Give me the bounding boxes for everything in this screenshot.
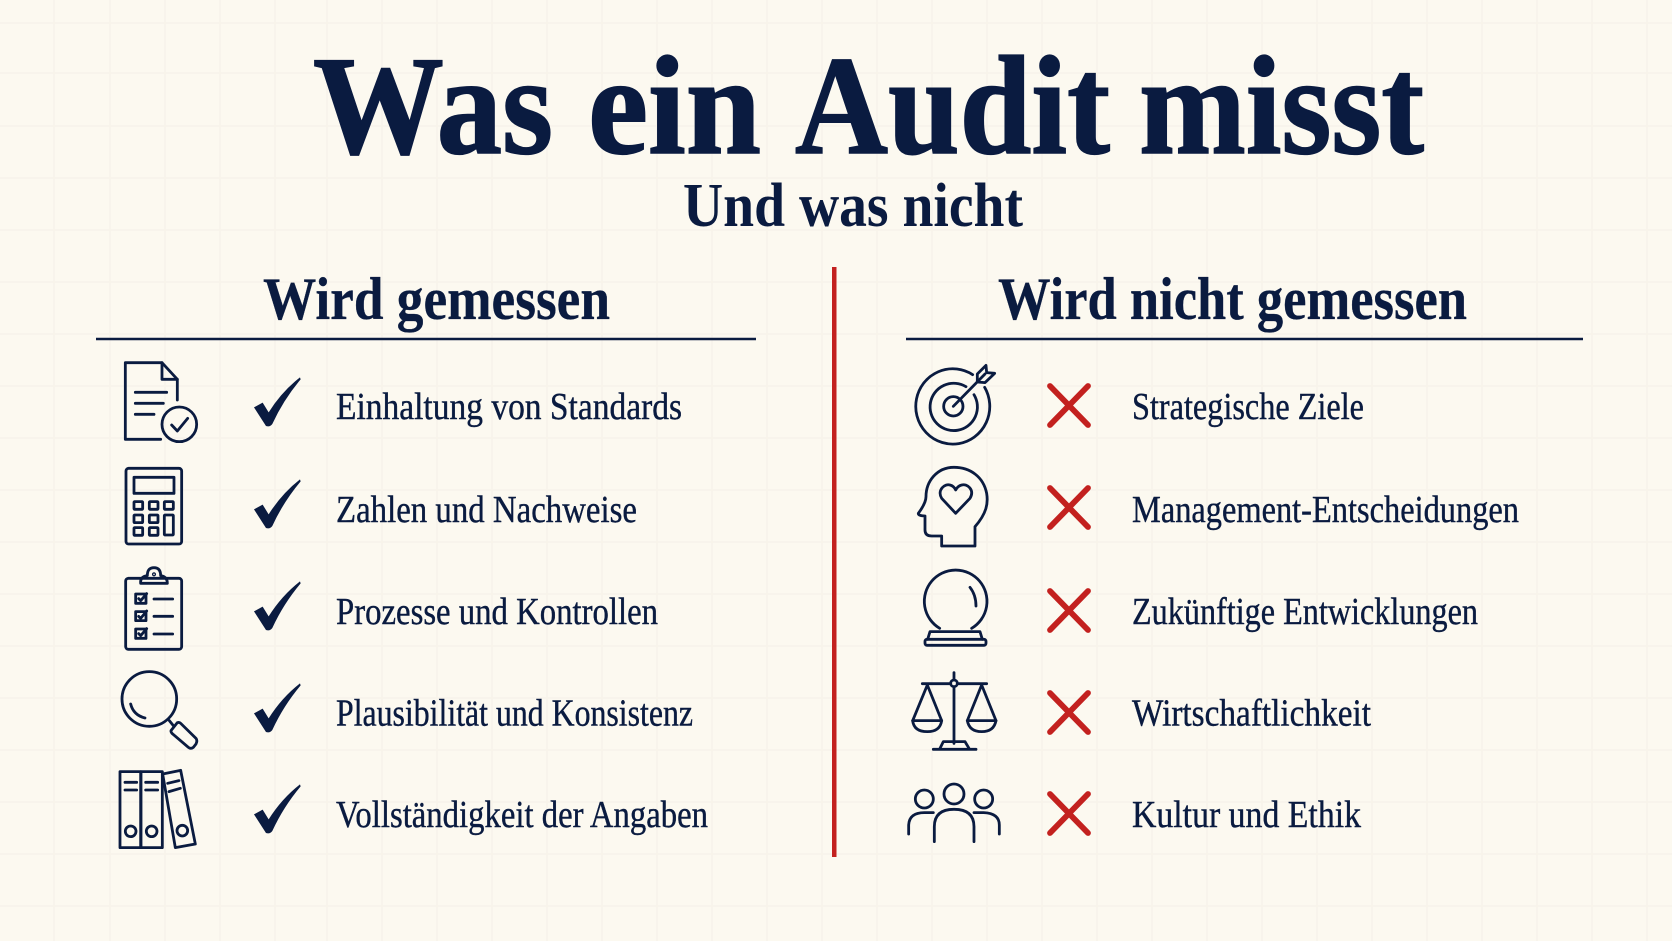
icon: balance scales bbox=[913, 673, 996, 749]
title: ein bbox=[588, 28, 761, 184]
icon: crystal ball bbox=[924, 570, 987, 645]
title bbox=[313, 28, 1424, 184]
label 3: Zukünftige Entwicklungen bbox=[1132, 591, 1478, 633]
icon: clipboard checklist bbox=[126, 568, 182, 649]
title: Was bbox=[313, 28, 553, 184]
heading: wird gemessen: Wird gemessen bbox=[263, 266, 610, 332]
label 1: Strategische Ziele bbox=[1132, 386, 1364, 428]
check mark 2 bbox=[254, 479, 301, 528]
cross 2 bbox=[1050, 488, 1088, 527]
icon: target with arrow bbox=[916, 365, 995, 444]
check mark 3 bbox=[254, 581, 301, 630]
label 3: Prozesse und Kontrollen bbox=[336, 591, 658, 633]
heading: wird nicht gemessen: Wird nicht gemessen bbox=[998, 266, 1467, 332]
cross 1 bbox=[1050, 386, 1088, 425]
icon: calculator bbox=[126, 468, 182, 544]
title: Audit bbox=[795, 28, 1110, 184]
cross 4 bbox=[1050, 693, 1088, 732]
label 5: Vollständigkeit der Angaben bbox=[336, 794, 708, 836]
label 4: Wirtschaftlichkeit bbox=[1132, 692, 1371, 734]
cross 3 bbox=[1050, 591, 1088, 630]
label 5: Kultur und Ethik bbox=[1132, 794, 1361, 836]
icon: document with check bbox=[125, 363, 197, 442]
cross 5 bbox=[1050, 794, 1088, 833]
check mark 5 bbox=[254, 784, 301, 833]
label 4: Plausibilität und Konsistenz bbox=[336, 692, 693, 734]
divider: red vertical line bbox=[832, 267, 836, 857]
label 2: Zahlen und Nachweise bbox=[336, 489, 637, 531]
icon: magnifying glass bbox=[122, 672, 197, 748]
check mark 4 bbox=[254, 683, 301, 732]
check mark 1 bbox=[254, 377, 301, 426]
label 2: Management-Entscheidungen bbox=[1132, 489, 1519, 531]
label 1: Einhaltung von Standards bbox=[336, 386, 682, 428]
panel: wird gemessen bbox=[96, 266, 756, 848]
title: misst bbox=[1139, 28, 1424, 184]
panel: wird nicht gemessen bbox=[906, 266, 1583, 842]
subtitle: Und was nicht bbox=[683, 172, 1023, 240]
icon: head with heart bbox=[918, 467, 987, 546]
icon: binders bbox=[120, 770, 195, 848]
icon: group of people bbox=[909, 784, 999, 842]
